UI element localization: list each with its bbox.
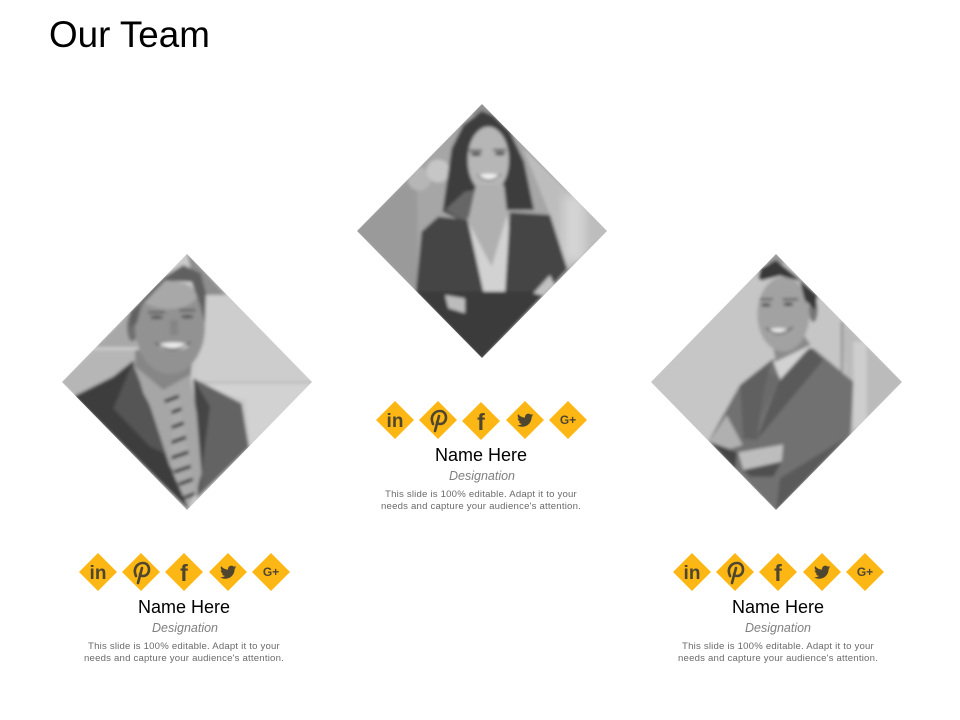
icon: google plus: G+ [560, 413, 576, 427]
icon: facebook [759, 553, 797, 591]
social icons: left [79, 553, 290, 591]
icon: facebook: f [180, 560, 188, 586]
icon: google plus [252, 553, 290, 591]
description: needs and capture your audience's attention. [678, 653, 878, 664]
icon: linkedin: in [387, 411, 403, 432]
icon: twitter [506, 401, 544, 439]
social icons: right [673, 553, 884, 591]
name: Name Here [435, 445, 527, 465]
icon: facebook: f [477, 409, 485, 435]
icon: pinterest [716, 553, 754, 591]
portrait: woman centre [357, 104, 607, 358]
icon: twitter [209, 553, 247, 591]
icon: linkedin: in [684, 563, 700, 584]
team member: centre [376, 401, 587, 512]
designation: Designation [745, 621, 811, 635]
description: needs and capture your audience's attention. [84, 653, 284, 664]
icon: facebook [165, 553, 203, 591]
icon: twitter [803, 553, 841, 591]
icon: linkedin [376, 401, 414, 439]
icon: google plus [846, 553, 884, 591]
team member: left [79, 553, 290, 664]
description: This slide is 100% editable. Adapt it to your [682, 641, 875, 652]
description: This slide is 100% editable. Adapt it to your [385, 489, 578, 500]
icon: linkedin [79, 553, 117, 591]
icon: facebook: f [774, 560, 782, 586]
name: Name Here [138, 597, 230, 617]
icon: google plus [549, 401, 587, 439]
portrait: man right [651, 254, 902, 510]
icon: pinterest [122, 553, 160, 591]
designation: Designation [152, 621, 218, 635]
description: This slide is 100% editable. Adapt it to your [88, 641, 281, 652]
icon: google plus: G+ [857, 565, 873, 579]
designation: Designation [449, 469, 515, 483]
description: needs and capture your audience's attention. [381, 501, 581, 512]
icon: google plus: G+ [263, 565, 279, 579]
portrait: man left [62, 254, 312, 510]
infographic canvas [50, 21, 902, 663]
icon: linkedin [673, 553, 711, 591]
icon: pinterest [419, 401, 457, 439]
title: Our Team [49, 14, 210, 55]
social icons: centre [376, 401, 587, 440]
icon: linkedin: in [90, 563, 106, 584]
icon: facebook [462, 402, 500, 440]
name: Name Here [732, 597, 824, 617]
team member: right [673, 553, 884, 664]
